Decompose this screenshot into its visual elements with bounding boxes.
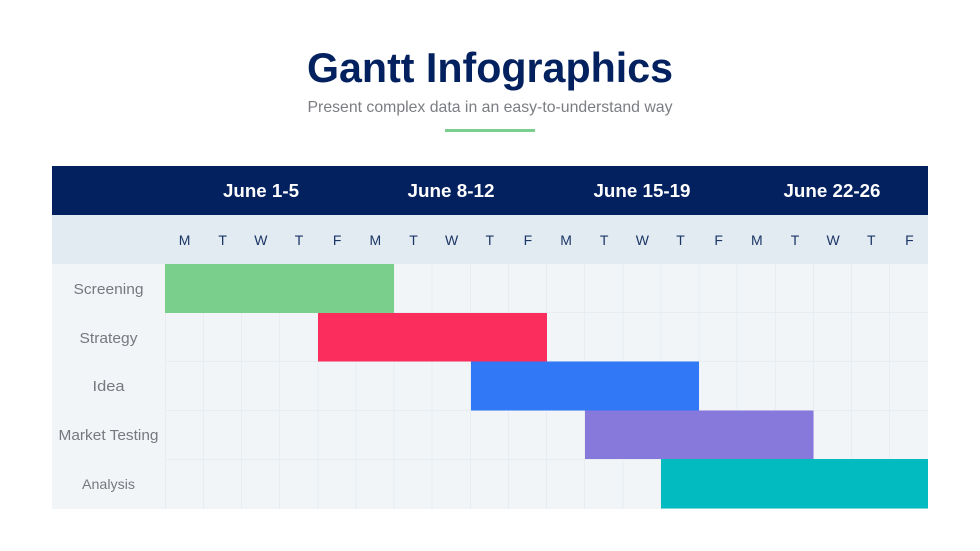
header band: weekdays: [52, 215, 928, 264]
subtitle: Present complex data in an easy-to-understand way: [308, 99, 672, 116]
header band: weekdays: M: [751, 232, 763, 248]
header band: weekdays: W: [826, 232, 840, 248]
row labels: Idea: [92, 378, 125, 395]
header band: weeks: June 15-19: [594, 180, 690, 201]
row labels: [58, 281, 158, 492]
row labels: Screening: [74, 281, 144, 298]
header band: weekdays: F: [524, 232, 532, 248]
header band: weekdays: T: [218, 232, 227, 248]
title accent line: [445, 129, 535, 132]
title: Gantt Infographics: [307, 44, 673, 91]
row labels: Market Testing: [58, 427, 158, 444]
header band: weekdays: T: [600, 232, 609, 248]
header band: weekdays: T: [295, 232, 304, 248]
header band: weekdays: W: [254, 232, 268, 248]
header band: weekdays: W: [445, 232, 459, 248]
header band: weekdays: F: [714, 232, 723, 248]
header band: weeks: June 22-26: [784, 180, 880, 201]
header band: weekdays: M: [560, 232, 572, 248]
bar: Analysis: [661, 459, 928, 508]
header band: weekdays: W: [636, 232, 650, 248]
panel: gantt chart: [52, 166, 928, 509]
row labels: Analysis: [82, 476, 135, 492]
header band: weekdays: M: [369, 232, 381, 248]
header band: weekdays: M: [179, 232, 190, 248]
header band: weekdays: T: [409, 232, 418, 248]
header band: weeks: June 1-5: [223, 180, 299, 201]
header band: weekdays: T: [486, 232, 495, 248]
bar: Strategy: [318, 313, 547, 362]
header band: weekdays: T: [676, 232, 685, 248]
bar: Screening: [165, 264, 394, 313]
header band: weekdays: F: [905, 232, 914, 248]
row labels: Strategy: [80, 330, 138, 347]
header band: weekdays: T: [791, 232, 800, 248]
bar: Market Testing: [585, 410, 814, 459]
header band: weeks: June 8-12: [408, 180, 494, 201]
header band: weeks: [52, 166, 928, 215]
header band: weekdays: T: [867, 232, 876, 248]
bar: Idea: [471, 362, 699, 410]
header band: weekdays: F: [333, 232, 341, 248]
grid background: [52, 264, 928, 509]
